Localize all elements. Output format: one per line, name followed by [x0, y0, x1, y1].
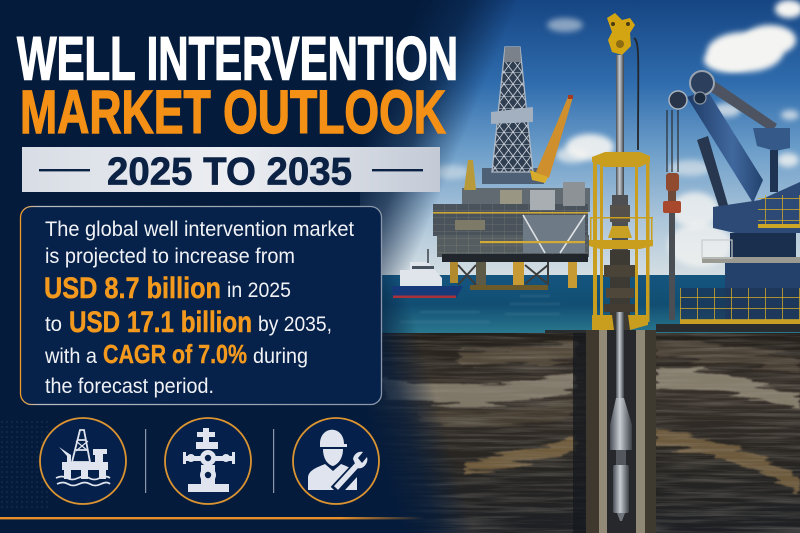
- platform decks: [433, 160, 590, 262]
- tower head: [753, 128, 790, 151]
- summary text: the forecast period.: [45, 375, 214, 398]
- summary text: USD 17.1 billion: [69, 306, 252, 339]
- blue pedestal crane: [669, 71, 800, 324]
- summary text: The global well intervention market: [45, 218, 354, 241]
- crane tie bar: [708, 80, 777, 132]
- lifting rod: [616, 55, 624, 200]
- hoist cable: [634, 38, 638, 150]
- downhole tool: [610, 312, 632, 521]
- date banner: [22, 147, 440, 194]
- mid railing: [702, 240, 732, 258]
- footer rule: [0, 517, 425, 519]
- icon: engineer with wrench: [293, 418, 379, 504]
- ship: [392, 249, 463, 298]
- summary text: in 2025: [227, 279, 291, 302]
- crane sheaves: [669, 71, 714, 109]
- yellow crane: [530, 95, 573, 183]
- summary panel: [20, 206, 382, 404]
- deck yellow railing: [680, 288, 800, 324]
- divider: [273, 429, 274, 493]
- crane boom: [687, 90, 763, 203]
- banner text: 2025 TO 2035: [107, 150, 352, 194]
- divider: [145, 429, 146, 493]
- crane housing: [713, 182, 800, 233]
- title line 2: MARKET OUTLOOK: [20, 78, 446, 147]
- sea: [360, 275, 800, 335]
- title: [17, 24, 458, 147]
- wellbore cross-section: [545, 312, 800, 533]
- crane lift arm: [697, 136, 728, 210]
- hanging travel block: [663, 110, 681, 320]
- offshore platform: [433, 47, 590, 290]
- sky: [360, 0, 800, 276]
- summary text: [44, 218, 354, 398]
- summary text: CAGR of 7.0%: [103, 339, 247, 369]
- mid column: [730, 233, 796, 258]
- summary text: to: [45, 313, 62, 336]
- derrick: [491, 47, 533, 172]
- icon: offshore rig: [40, 418, 126, 504]
- summary text: during: [253, 345, 308, 368]
- dotted texture: [0, 420, 50, 510]
- platform legs: [450, 250, 577, 290]
- geology strata: [360, 333, 800, 533]
- summary text: USD 8.7 billion: [44, 272, 221, 305]
- summary text: is projected to increase from: [45, 245, 295, 268]
- upper yellow railing: [758, 195, 800, 228]
- wellhead stack: [604, 195, 636, 336]
- title line 1: WELL INTERVENTION: [17, 24, 458, 94]
- icon: wellhead: [165, 418, 251, 504]
- hook block: [607, 13, 635, 55]
- summary text: with a: [44, 345, 97, 368]
- rock bands: [360, 333, 800, 533]
- yellow frame: [589, 152, 653, 330]
- summary text: by 2035,: [258, 313, 332, 336]
- background: photo scene: [360, 0, 800, 533]
- well intervention tower: [589, 13, 653, 336]
- clouds: [434, 0, 800, 267]
- pedestal: [725, 262, 800, 324]
